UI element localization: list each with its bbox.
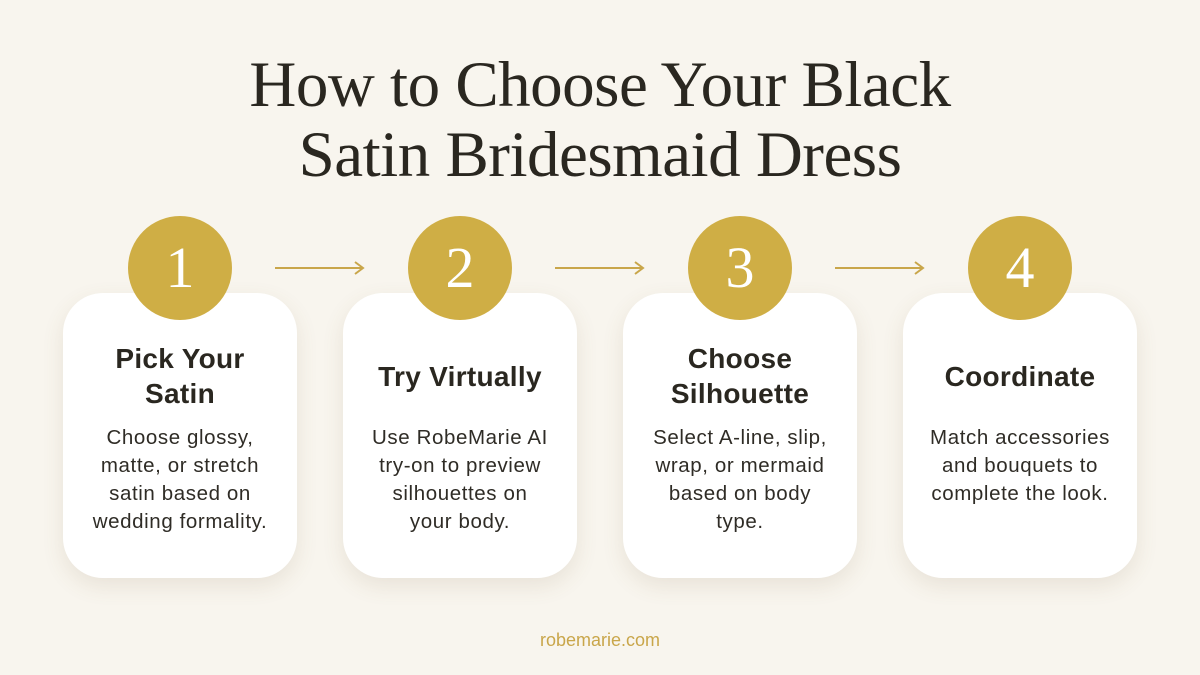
card 3: Silhouette (671, 378, 809, 409)
step circle 1 (128, 216, 232, 320)
card 2: your body. (410, 510, 510, 533)
card 1: Pick Your (115, 343, 245, 374)
card 2: Use RobeMarie AI (372, 426, 548, 449)
card 1 (63, 293, 297, 578)
step circle 4 (968, 216, 1072, 320)
card 2: silhouettes on (393, 482, 527, 505)
card 1: Choose glossy, (106, 426, 254, 449)
step circle 1: 1 (166, 235, 194, 300)
card 2: Try Virtually (378, 360, 542, 392)
card 3: Choose (688, 343, 792, 374)
step circle 2: 2 (446, 235, 474, 300)
card 4: Match accessories (930, 426, 1110, 449)
title: Satin Bridesmaid Dress (299, 119, 901, 191)
footer url: robemarie.com (540, 630, 660, 650)
card 4: complete the look. (931, 482, 1109, 505)
card 4: Coordinate (945, 360, 1095, 392)
card 3: wrap, or mermaid (655, 454, 825, 477)
card 4: and bouquets to (942, 454, 1098, 477)
title: How to Choose Your Black (249, 49, 951, 121)
card 2 (343, 293, 577, 578)
step circle 3 (688, 216, 792, 320)
arrow 3 (835, 261, 924, 275)
step circle 4: 4 (1006, 235, 1034, 300)
card 1: wedding formality. (93, 510, 267, 533)
card 1: Satin (145, 378, 215, 409)
arrow 2 (555, 261, 644, 275)
card 3: type. (716, 510, 764, 533)
title (249, 49, 952, 191)
step circle 2 (408, 216, 512, 320)
card 3 (623, 293, 857, 578)
card 4 (903, 293, 1137, 578)
card 1: matte, or stretch (101, 454, 259, 477)
card 3: based on body (669, 482, 811, 505)
card 3: Select A-line, slip, (653, 426, 827, 449)
card 1: satin based on (109, 482, 251, 505)
arrow 1 (275, 261, 364, 275)
card 2: try-on to preview (379, 454, 541, 477)
step circle 3: 3 (726, 235, 754, 300)
